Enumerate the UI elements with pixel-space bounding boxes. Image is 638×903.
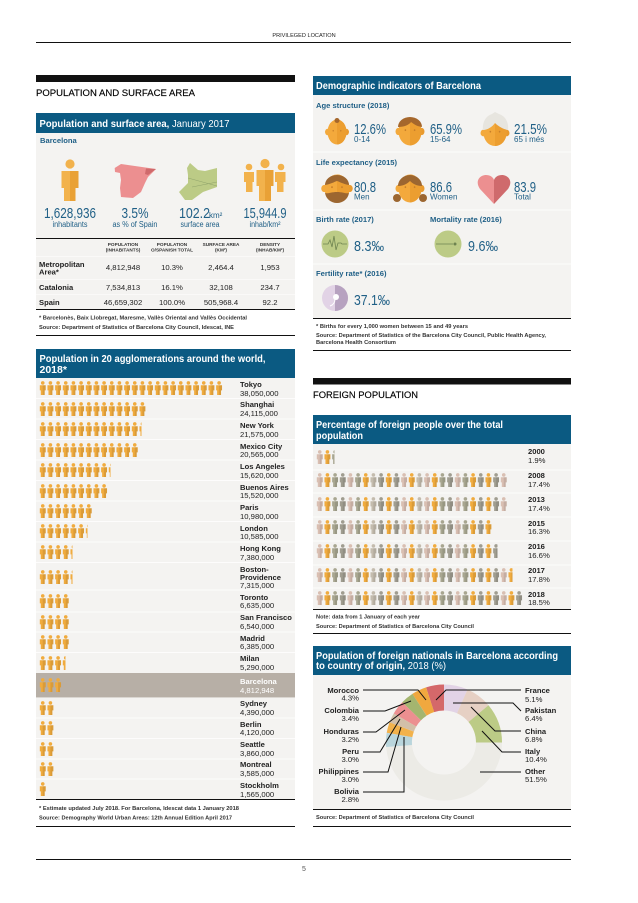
city labels: Los Angeles bbox=[240, 462, 285, 471]
fertility rate heading: Fertility rate* (2016) bbox=[316, 269, 387, 278]
left labels: Honduras bbox=[324, 727, 359, 736]
data table: Area* bbox=[39, 268, 59, 276]
right labels bbox=[525, 686, 557, 784]
stat: men bbox=[354, 179, 376, 202]
left labels: 2.8% bbox=[341, 795, 359, 804]
stat: inhabitants: inhabitants bbox=[52, 220, 88, 229]
birth rate heading: Birth rate (2017) bbox=[316, 215, 374, 224]
donut chart bbox=[399, 698, 489, 788]
left labels: 3.2% bbox=[341, 735, 359, 744]
source note: Source: Department of Statistics of Barcelona City Council bbox=[316, 815, 474, 821]
city labels: 10,980,000 bbox=[240, 512, 278, 521]
left labels: Colombia bbox=[324, 706, 360, 715]
city labels: 3,860,000 bbox=[240, 749, 274, 758]
stat: 65 and over: 65 i més bbox=[514, 135, 544, 144]
footnote: Barcelona Health Consortium bbox=[316, 340, 396, 346]
city labels: Barcelona bbox=[240, 677, 277, 686]
stat: men: Men bbox=[354, 192, 370, 202]
data table: 505,968.4 bbox=[204, 298, 239, 307]
panel: agglomerations bbox=[36, 349, 295, 827]
city labels: San Francisco bbox=[240, 613, 292, 622]
city labels: Shanghai bbox=[240, 400, 274, 409]
stat: total bbox=[514, 179, 536, 202]
city labels: 4,812,948 bbox=[240, 686, 274, 695]
city labels: Madrid bbox=[240, 634, 265, 643]
stat: 65 and over bbox=[514, 121, 547, 144]
footnote: Source: Department of Statistics of Barcelona City Council bbox=[316, 624, 474, 630]
icon: man bbox=[321, 174, 353, 203]
data table: 2,464.4 bbox=[208, 263, 235, 272]
year labels: 17.8% bbox=[528, 575, 550, 584]
footnote: * Barcelonès, Baix Llobregat, Maresme, Vallès Oriental and Vallès Occidental bbox=[39, 316, 247, 322]
footnote: * Estimate updated July 2018. For Barcelona, Idescat data 1 January 2018 bbox=[39, 806, 239, 812]
footnote: Source: Demography World Urban Areas: 12th Annual Edition April 2017 bbox=[39, 816, 232, 822]
left labels bbox=[318, 686, 360, 804]
left labels: 3.0% bbox=[341, 775, 359, 784]
data table bbox=[36, 238, 295, 307]
data table: 92.2 bbox=[263, 298, 277, 307]
Barcelona highlight row bbox=[36, 673, 295, 698]
stat: 15-64: 65.9% bbox=[430, 121, 462, 138]
icon: map of Spain bbox=[115, 164, 156, 198]
city labels: 7,315,000 bbox=[240, 581, 274, 590]
data table: (KM²) bbox=[215, 248, 227, 252]
age structure heading: Age structure (2018) bbox=[316, 101, 390, 110]
data table: Catalonia bbox=[39, 283, 74, 292]
city labels: London bbox=[240, 524, 268, 533]
icon: child bbox=[325, 118, 349, 144]
year labels: 16.3% bbox=[528, 527, 550, 536]
stat: 15-64: 15-64 bbox=[430, 135, 451, 144]
panel: demographic indicators bbox=[313, 76, 571, 351]
year labels: 2015 bbox=[528, 519, 546, 528]
city labels: 15,620,000 bbox=[240, 471, 278, 480]
right labels: 10.4% bbox=[525, 755, 547, 764]
panel heading: Population and surface area, January 2017 bbox=[40, 118, 230, 130]
right labels: Pakistan bbox=[525, 706, 557, 715]
right labels: Other bbox=[525, 767, 545, 776]
data table: (INHAB/KM²) bbox=[256, 248, 284, 252]
city labels: Berlin bbox=[240, 720, 262, 729]
stat: 0-14 bbox=[354, 121, 386, 144]
city labels: 1,565,000 bbox=[240, 790, 274, 799]
city labels: 4,120,000 bbox=[240, 728, 274, 737]
icon: heart bbox=[478, 175, 510, 204]
stat: inhabitants bbox=[44, 205, 96, 229]
panel: percentage of foreign people: population bbox=[316, 430, 363, 442]
panel: percentage of foreign people bbox=[313, 415, 571, 634]
year labels: 1.9% bbox=[528, 456, 546, 465]
year labels: 2018 bbox=[528, 590, 545, 599]
right labels: Italy bbox=[525, 747, 541, 756]
city labels: Providence bbox=[240, 573, 281, 582]
left labels: 4.3% bbox=[341, 694, 359, 702]
city labels: Stockholm bbox=[240, 781, 279, 790]
city labels: New York bbox=[240, 421, 275, 430]
section title: population and surface area: POPULATION AND SURFACE AREA bbox=[36, 88, 196, 99]
right labels: France bbox=[525, 686, 550, 695]
stat: mortality rate: 9.6‰ bbox=[468, 238, 498, 255]
data table: 10.3% bbox=[161, 263, 183, 272]
page header: PRIVILEGED LOCATION bbox=[272, 33, 336, 39]
city labels: 7,380,000 bbox=[240, 553, 274, 562]
year labels: 2017 bbox=[528, 566, 545, 575]
stat: surface area: 102.2 bbox=[179, 205, 210, 222]
city labels: 4,390,000 bbox=[240, 708, 274, 717]
city labels: 5,290,000 bbox=[240, 663, 274, 672]
footnote: Source: Department of Statistics of Barcelona City Council, Idescat, INE bbox=[39, 325, 234, 331]
panel: population and surface area bbox=[36, 113, 295, 336]
stat: share of Spain: as % of Spain bbox=[112, 220, 158, 229]
icon: mortality flat line bbox=[434, 230, 462, 258]
city labels: 6,385,000 bbox=[240, 642, 274, 651]
city labels: Toronto bbox=[240, 593, 268, 602]
data table: (INHABITANTS) bbox=[106, 248, 141, 252]
year labels: 16.6% bbox=[528, 551, 550, 560]
icon: adult bbox=[396, 117, 424, 146]
icon: elderly bbox=[481, 112, 509, 146]
right labels: 6.8% bbox=[525, 735, 543, 744]
section title: foreign population bbox=[313, 378, 571, 401]
icon: fertility bbox=[322, 285, 348, 311]
panel heading: 2018* bbox=[40, 364, 68, 376]
left labels: Philippines bbox=[318, 767, 359, 776]
data table: Spain bbox=[39, 298, 60, 307]
year labels: 17.4% bbox=[528, 504, 550, 513]
year labels: 2013 bbox=[528, 495, 545, 504]
city labels: 15,520,000 bbox=[240, 491, 278, 500]
stat: share of Spain: 3.5% bbox=[122, 205, 148, 222]
icon: three people bbox=[244, 159, 286, 201]
city labels: 38,050,000 bbox=[240, 389, 278, 398]
city labels: Tokyo bbox=[240, 380, 262, 389]
data table: 7,534,813 bbox=[106, 283, 140, 292]
section title: population and surface area bbox=[36, 75, 295, 99]
stat: 0-14: 12.6% bbox=[354, 121, 386, 138]
pictogram rows bbox=[40, 381, 222, 796]
year labels: 18.5% bbox=[528, 598, 550, 607]
left labels: 3.0% bbox=[341, 755, 359, 764]
city labels: 21,575,000 bbox=[240, 430, 278, 439]
stat: men: 80.8 bbox=[354, 179, 376, 196]
stat: birth rate: 8.3‰ bbox=[354, 238, 384, 255]
year labels: 2000 bbox=[528, 447, 545, 456]
footnote: Source: Department of Statistics of the Barcelona City Council, Public Health Agency, bbox=[316, 333, 546, 339]
data table: Metropolitan bbox=[39, 260, 85, 269]
city labels: Boston- bbox=[240, 565, 269, 574]
data table: 1,953 bbox=[260, 263, 280, 272]
mortality rate heading: Mortality rate (2016) bbox=[430, 215, 502, 224]
data table: 100.0% bbox=[159, 298, 185, 307]
city labels: Hong Kong bbox=[240, 544, 281, 553]
footnote bbox=[39, 806, 239, 822]
panel heading: Demographic indicators of Barcelona bbox=[316, 80, 481, 92]
icon: woman bbox=[393, 174, 427, 202]
stat: women: 86.6 bbox=[430, 179, 452, 196]
city labels: 10,585,000 bbox=[240, 532, 278, 541]
stat: total: Total bbox=[514, 192, 531, 202]
city labels: 6,540,000 bbox=[240, 622, 274, 631]
leader lines bbox=[363, 690, 521, 792]
subheading Barcelona: Barcelona bbox=[40, 136, 77, 145]
data table: SURFACE AREA bbox=[203, 242, 240, 247]
panel heading: Percentage of foreign people over the total bbox=[316, 419, 503, 431]
city labels: Sydney bbox=[240, 699, 268, 708]
data table: 32,108 bbox=[209, 283, 233, 292]
year labels bbox=[528, 447, 550, 607]
stat: inhabitants: 1,628,936 bbox=[44, 205, 96, 222]
stat: total: 83.9 bbox=[514, 179, 536, 196]
panel heading: Population in 20 agglomerations around the world, bbox=[40, 353, 266, 365]
right labels: 51.5% bbox=[525, 775, 547, 784]
year labels: 17.4% bbox=[528, 480, 550, 489]
stat: fertility rate: 37.1‰ bbox=[354, 292, 390, 309]
page footer: 5 bbox=[302, 866, 306, 873]
stat: share of Spain bbox=[112, 205, 158, 229]
data table: POPULATION bbox=[157, 242, 188, 247]
panel heading: Population of foreign nationals in Barcelona according bbox=[316, 650, 558, 662]
city labels: 3,585,000 bbox=[240, 769, 274, 778]
stat: 0-14: 0-14 bbox=[354, 135, 371, 144]
city labels: Paris bbox=[240, 503, 259, 512]
data table: 4,812,948 bbox=[106, 263, 140, 272]
panel: foreign nationals by origin bbox=[313, 646, 571, 827]
section title: foreign population: FOREIGN POPULATION bbox=[313, 390, 418, 401]
left labels: Morocco bbox=[327, 686, 359, 695]
icon: birth pulse bbox=[322, 230, 348, 258]
right labels: 6.4% bbox=[525, 714, 543, 723]
left labels: 3.4% bbox=[341, 714, 359, 723]
city labels: Buenos Aires bbox=[240, 483, 289, 492]
icon: person bbox=[62, 159, 78, 201]
stat: density bbox=[244, 205, 286, 229]
stat: density: inhab/km² bbox=[250, 220, 281, 229]
data table: O/SPANISH TOTAL bbox=[151, 248, 193, 252]
footnote bbox=[39, 316, 247, 331]
year labels: 2016 bbox=[528, 542, 545, 551]
city labels: 6,635,000 bbox=[240, 601, 274, 610]
life expectancy heading: Life expectancy (2015) bbox=[316, 158, 398, 167]
city labels: 24,115,000 bbox=[240, 409, 278, 418]
stat: surface area bbox=[179, 205, 223, 229]
city labels: Milan bbox=[240, 654, 260, 663]
stat: surface area: km² bbox=[209, 211, 223, 220]
footnote: Note: data from 1 January of each year bbox=[316, 614, 421, 620]
right labels: 5.1% bbox=[525, 695, 543, 704]
left labels: Bolivia bbox=[334, 787, 360, 796]
stat: surface area: surface area bbox=[180, 220, 220, 229]
stat: density: 15,944.9 bbox=[244, 205, 286, 222]
left labels: Peru bbox=[342, 747, 359, 756]
right labels: China bbox=[525, 727, 547, 736]
city labels bbox=[240, 380, 292, 799]
footnote: * Births for every 1,000 women between 15 and 49 years bbox=[316, 324, 468, 330]
stat: 65 and over: 21.5% bbox=[514, 121, 547, 138]
data table: 46,659,302 bbox=[104, 298, 142, 307]
year labels: 2008 bbox=[528, 471, 545, 480]
stat: 15-64 bbox=[430, 121, 462, 144]
data table: 16.1% bbox=[161, 283, 183, 292]
city labels: Mexico City bbox=[240, 442, 283, 451]
footnote bbox=[316, 614, 474, 630]
stat: women: Women bbox=[430, 192, 457, 202]
city labels: Montreal bbox=[240, 760, 272, 769]
data table: 234.7 bbox=[260, 283, 280, 292]
city labels: Seattle bbox=[240, 740, 265, 749]
city labels: 20,565,000 bbox=[240, 450, 278, 459]
panel: foreign nationals by origin: to country of origin, 2018 (%) bbox=[316, 660, 446, 672]
icon: map of Barcelona area bbox=[179, 163, 217, 200]
footnote bbox=[316, 324, 546, 346]
data table: POPULATION bbox=[108, 242, 139, 247]
data table: DENSITY bbox=[260, 242, 281, 247]
pictogram rows bbox=[317, 450, 522, 605]
